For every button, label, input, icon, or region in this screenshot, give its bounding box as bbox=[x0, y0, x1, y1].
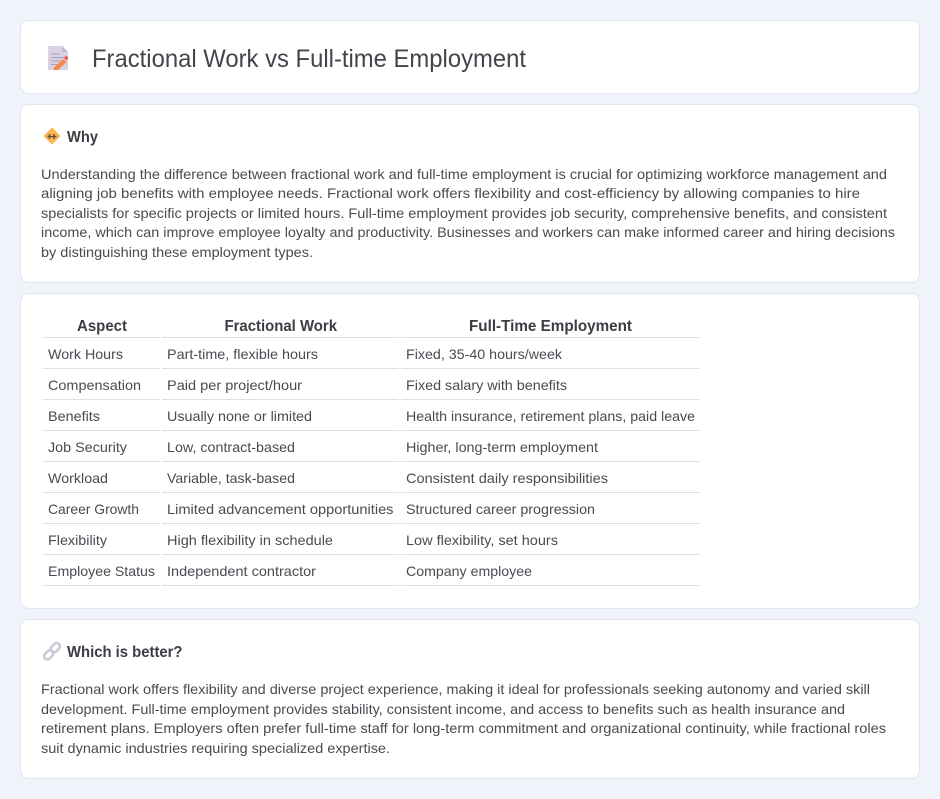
why paragraph: Understanding the difference between fractional work and full-time employment is crucial for optimizing workforce management and bbox=[41, 166, 887, 182]
icon: memo with pencil bbox=[48, 46, 68, 70]
row: benefits: Health insurance, retirement plans, paid leave bbox=[406, 408, 695, 424]
row: flexibility: High flexibility in schedule bbox=[167, 532, 333, 548]
row: work hours: Fixed, 35-40 hours/week bbox=[406, 346, 563, 362]
row: job security: Low, contract-based bbox=[167, 439, 295, 455]
why paragraph: income, which can improve employee loyalty and productivity. Businesses and workers can make informed career and hiring decisions bbox=[41, 224, 895, 240]
which is better paragraph: suit dynamic industries requiring specialized expertise. bbox=[41, 740, 390, 756]
why paragraph: by distinguishing these employment types. bbox=[41, 244, 313, 260]
row: benefits: Benefits bbox=[48, 408, 100, 424]
row: compensation bbox=[48, 377, 567, 393]
row: job security: Higher, long-term employment bbox=[406, 439, 598, 455]
row: workload: Variable, task-based bbox=[167, 470, 295, 486]
which is better paragraph: Fractional work offers flexibility and diverse project experience, making it ideal for professionals seeking autonomy and varied skill bbox=[41, 681, 870, 697]
row: benefits bbox=[48, 408, 695, 424]
panel: which is better bbox=[20, 620, 920, 778]
table rules bbox=[43, 338, 700, 586]
row: flexibility: Low flexibility, set hours bbox=[406, 532, 558, 548]
row: benefits: Usually none or limited bbox=[167, 408, 312, 424]
panel: title header bbox=[20, 20, 920, 94]
row: career growth bbox=[48, 501, 595, 517]
table header: Aspect bbox=[77, 318, 127, 335]
row: workload: Workload bbox=[48, 470, 108, 486]
panel: comparison table bbox=[20, 294, 920, 608]
row: job security: Job Security bbox=[48, 439, 127, 455]
which is better paragraph: development. Full-time employment provides stability, consistent income, and access to benefits such as health insurance and bbox=[41, 701, 845, 717]
row: work hours: Part-time, flexible hours bbox=[167, 346, 318, 362]
row: work hours bbox=[48, 346, 563, 362]
row: career growth: Career Growth bbox=[48, 501, 139, 517]
which is better paragraph bbox=[41, 681, 886, 756]
why paragraph: specialists for specific projects or limited hours. Full-time employment provides job security, comprehensive benefits, and consistent bbox=[41, 205, 887, 221]
row: flexibility: Flexibility bbox=[48, 532, 107, 548]
which is better paragraph: retirement plans. Employers often prefer full-time staff for long-term commitment and organizational continuity, while fractional roles bbox=[41, 720, 886, 736]
why paragraph: aligning job benefits with employee needs. Fractional work offers flexibility and cost-efficiency by allowing companies to hire bbox=[41, 185, 860, 201]
row: employee status: Employee Status bbox=[48, 563, 155, 579]
row: employee status: Company employee bbox=[406, 563, 532, 579]
row: career growth: Limited advancement opportunities bbox=[167, 501, 394, 517]
why paragraph bbox=[41, 166, 895, 260]
row: employee status: Independent contractor bbox=[167, 563, 316, 579]
row: compensation: Paid per project/hour bbox=[167, 377, 302, 393]
row: compensation: Fixed salary with benefits bbox=[406, 377, 567, 393]
row: job security bbox=[48, 439, 598, 455]
row: flexibility bbox=[48, 532, 558, 548]
title: Fractional Work vs Full-time Employment bbox=[92, 45, 526, 73]
row: workload bbox=[48, 470, 608, 486]
row: workload: Consistent daily responsibilities bbox=[406, 470, 608, 486]
table header: Full-Time Employment bbox=[469, 318, 632, 335]
row: career growth: Structured career progression bbox=[406, 501, 595, 517]
heading: why: Why bbox=[67, 129, 98, 146]
panel: why bbox=[20, 104, 920, 282]
heading: which is better: Which is better? bbox=[67, 644, 182, 661]
icon: chain link bbox=[43, 642, 61, 661]
row: work hours: Work Hours bbox=[48, 346, 123, 362]
table header: Fractional Work bbox=[224, 318, 337, 335]
icon: warning diamond bbox=[44, 128, 60, 144]
row: employee status bbox=[48, 563, 532, 579]
table header bbox=[77, 318, 632, 335]
row: compensation: Compensation bbox=[48, 377, 141, 393]
